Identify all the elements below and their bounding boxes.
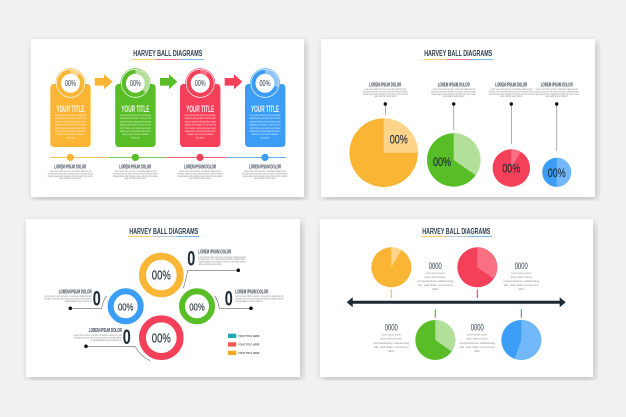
callout: left: LOREM IPSUM DOLOR [59, 290, 92, 296]
panel: ring cluster [26, 219, 300, 377]
text block: top right [503, 261, 540, 291]
heading: descending pies: HARVEY BALL DIAGRAMS [424, 49, 493, 58]
blue pie with label: magna aliquam erat volutpat ut wisi enim ad minim veniam [534, 92, 580, 96]
card: red: Lorem ipsum dolor sit amet, consectetur [185, 113, 216, 117]
arrow: yellow [95, 74, 113, 89]
pie: red [457, 247, 497, 298]
card: yellow: YOUR TITLE [56, 104, 84, 114]
timeline captions: LOREM IPSUM DOLOR [54, 165, 87, 171]
callout: right: LOREM IPSUM DOLOR [235, 290, 269, 296]
card: red: aliquam erat volutpat. Ut wisi enim ad [185, 123, 216, 127]
callout: left: Lorem ipsum dolor sit amet, consectetur adipiscing elit [44, 294, 92, 298]
callout: top right: 0 [187, 248, 195, 271]
callout: top right: LOREM IPSUM DOLOR [198, 250, 232, 256]
text block: top middle [417, 261, 454, 291]
card: blue: minim veniam, quis nostrud exerci tation [250, 126, 281, 130]
callout: right: Lorem ipsum dolor sit amet, consectetur adipiscing elit [235, 294, 283, 298]
callout: right [215, 288, 284, 311]
text block: bottom middle [459, 323, 496, 353]
card: red: euismod tincidunt ut laoreet dolore magna [185, 119, 216, 123]
card: yellow: ullamcorper suscipit lobortis nisl ut [55, 129, 86, 133]
timeline with dots [50, 154, 286, 161]
pie: yellow [371, 247, 411, 298]
card: green: adipiscing elit, sed diam nonummy nibh [120, 116, 151, 120]
card: green: euismod tincidunt ut laoreet dolore magna [120, 119, 151, 123]
legend: YOUR TITLE HERE [238, 351, 260, 355]
heading: process cards [132, 49, 204, 60]
callout: top right: quis nostrud exerci tation [198, 262, 222, 266]
card: yellow: 00% [65, 79, 76, 88]
text block: bottom left: nibh. [388, 349, 395, 353]
card: yellow: duis autem [66, 135, 75, 139]
timeline captions [48, 165, 288, 180]
arrow: red [225, 74, 242, 89]
callout: right: 0 [225, 288, 233, 311]
card: yellow: minim veniam, quis nostrud exerci tation [55, 126, 86, 130]
card: green: aliquip ex ea commodo consequat [122, 132, 149, 136]
callout: bottom left: magna aliquam erat volutpat ut [91, 338, 121, 342]
card: blue: Lorem ipsum dolor sit amet, consectetur [250, 113, 281, 117]
timeline captions: Lorem ipsum dolor sit amet, consectetur adipiscing elit [49, 169, 91, 173]
yellow pie with label: 00% [390, 132, 408, 146]
text block: top right: ipsum dolor sit amet, [510, 275, 533, 279]
red pie with label: 00% [502, 162, 521, 176]
red pie with label: Lorem ipsum dolor sit amet, consectetur adipiscing elit [490, 87, 532, 91]
callout: left: 0 [93, 288, 101, 311]
callout: right: magna aliquam erat volutpat ut [236, 299, 263, 303]
callout: left: magna aliquam erat volutpat ut [64, 299, 92, 303]
ring: blue left [111, 291, 141, 321]
timeline captions: LOREM IPSUM DOLOR [184, 165, 216, 171]
card: blue: 00% [260, 79, 270, 88]
ring: yellow top: 00% [152, 269, 171, 283]
red pie with label: LOREM IPSUM DOLOR [495, 83, 528, 89]
text block: top right: nibh. [518, 287, 525, 291]
card: yellow [50, 68, 91, 147]
red pie with label: quis nostrud exerci tation [500, 94, 523, 98]
text block: top middle: elit, sed diam nonummy [418, 283, 454, 287]
ring: red bottom: 00% [152, 331, 171, 345]
card: yellow: euismod tincidunt ut laoreet dolore magna [55, 119, 86, 123]
panel: descending pies [321, 39, 595, 197]
card: red: ullamcorper suscipit lobortis nisl ut [185, 129, 216, 133]
timeline captions: LOREM IPSUM DOLOR [249, 165, 281, 171]
heading: timeline pies [421, 227, 492, 237]
green pie with label: magna aliquam erat volutpat ut wisi enim ad minim veniam [431, 92, 477, 96]
timeline captions: sed diam nonummy nibh euismod tincidunt ut laoreet dolore [48, 171, 93, 175]
heading: ring cluster [128, 227, 199, 237]
timeline captions: quis nostrud exerci tation [124, 176, 147, 180]
card: red: aliquip ex ea commodo consequat [187, 132, 213, 136]
timeline captions: sed diam nonummy nibh euismod tincidunt ut laoreet dolore [178, 171, 223, 175]
card: yellow: Lorem ipsum dolor sit amet, consectetur [55, 113, 86, 117]
pie: blue [501, 309, 541, 360]
red pie with label: magna aliquam erat volutpat ut wisi enim ad minim veniam [489, 92, 534, 96]
card: green: Lorem ipsum dolor sit amet, consectetur [120, 113, 151, 117]
card: blue: aliquam erat volutpat. Ut wisi enim ad [250, 123, 281, 127]
timeline captions: Lorem ipsum dolor sit amet, consectetur adipiscing elit [114, 169, 156, 173]
text block: top middle: 0000 [429, 261, 442, 271]
ring: green right: 00% [189, 301, 205, 313]
yellow pie with label: Lorem ipsum dolor sit amet, consectetur adipiscing elit [364, 87, 406, 91]
timeline captions: sed diam nonummy nibh euismod tincidunt ut laoreet dolore [242, 171, 288, 175]
card: green: YOUR TITLE [121, 104, 149, 114]
legend: YOUR TITLE HERE [238, 334, 260, 338]
legend [228, 334, 260, 355]
callout: left [44, 288, 107, 311]
double arrow [347, 297, 566, 307]
text block: top right: 0000 [515, 261, 528, 271]
timeline captions: magna aliquam erat volutpat ut wisi enim ad minim veniam [242, 174, 288, 178]
text block: bottom middle: Lorem ipsum Lorem [467, 333, 488, 337]
card: green [115, 68, 156, 147]
card: green: aliquam erat volutpat. Ut wisi enim ad [120, 123, 151, 127]
text block: bottom left: elit, sed diam nonummy [374, 345, 410, 349]
card: green: minim veniam, quis nostrud exerci tation [120, 126, 151, 130]
card: blue: aliquip ex ea commodo consequat [252, 132, 278, 136]
card: blue: euismod tincidunt ut laoreet dolore magna [250, 119, 281, 123]
heading: process cards: HARVEY BALL DIAGRAMS [133, 49, 203, 58]
timeline captions: quis nostrud exerci tation [189, 176, 211, 180]
timeline captions: magna aliquam erat volutpat ut wisi enim ad minim veniam [48, 174, 93, 178]
panel: timeline pies [320, 219, 593, 377]
card: green: ullamcorper suscipit lobortis nisl ut [120, 129, 151, 133]
heading: descending pies [423, 49, 493, 60]
timeline captions: quis nostrud exerci tation [254, 176, 276, 180]
green pie with label: sed diam nonummy nibh euismod tincidunt ut laoreet dolore [431, 89, 477, 93]
timeline captions: Lorem ipsum dolor sit amet, consectetur adipiscing elit [244, 169, 286, 173]
timeline captions: Lorem ipsum dolor sit amet, consectetur adipiscing elit [179, 169, 221, 173]
text block: bottom left: consectetuer adipiscing [373, 341, 410, 345]
ring: yellow top [142, 256, 180, 294]
card: red: minim veniam, quis nostrud exerci tation [185, 126, 216, 130]
card: red: duis autem [196, 135, 205, 139]
red pie with label [489, 83, 534, 187]
text block: bottom middle: ipsum dolor sit amet, [466, 337, 489, 341]
blue pie with label: LOREM IPSUM DOLOR [541, 83, 573, 89]
text block: top middle: nibh. [432, 287, 439, 291]
callout: right: sed diam nonummy nibh euismod tincidunt ut laoreet dolore [235, 296, 284, 300]
card: red: adipiscing elit, sed diam nonummy nibh [185, 116, 216, 120]
card: yellow: aliquip ex ea commodo consequat [58, 132, 84, 136]
red pie with label: sed diam nonummy nibh euismod tincidunt ut laoreet dolore [489, 89, 534, 93]
blue pie with label: Lorem ipsum dolor sit amet, consectetur adipiscing elit [536, 87, 578, 91]
yellow pie with label: LOREM IPSUM DOLOR [369, 83, 402, 89]
card: blue: duis autem [260, 135, 270, 139]
card: blue [245, 68, 285, 147]
text block: top right: Lorem ipsum Lorem [511, 271, 532, 275]
callout: bottom left: Lorem ipsum dolor sit amet, consectetur adipiscing elit [74, 333, 122, 337]
callout: bottom left [74, 326, 150, 361]
callout: bottom left: 0 [123, 326, 131, 349]
ring: green right [182, 291, 212, 321]
timeline captions: sed diam nonummy nibh euismod tincidunt ut laoreet dolore [113, 171, 158, 175]
blue pie with label: quis nostrud exerci tation [546, 94, 568, 98]
card: blue: adipiscing elit, sed diam nonummy nibh [250, 116, 281, 120]
text block: bottom left: Lorem ipsum Lorem [381, 333, 402, 337]
text block: bottom middle: 0000 [471, 323, 484, 333]
card: green: duis autem [131, 135, 140, 139]
card: red: 00% [195, 79, 206, 88]
card: red [180, 68, 220, 147]
yellow pie with label [349, 83, 418, 187]
timeline captions: magna aliquam erat volutpat ut wisi enim ad minim veniam [113, 174, 158, 178]
card: yellow: aliquam erat volutpat. Ut wisi enim ad [55, 123, 86, 127]
blue pie with label [534, 83, 580, 187]
ring: blue left: 00% [118, 301, 133, 313]
blue pie with label: sed diam nonummy nibh euismod tincidunt ut laoreet dolore [534, 89, 580, 93]
timeline captions: magna aliquam erat volutpat ut wisi enim ad minim veniam [178, 174, 223, 178]
card: yellow: adipiscing elit, sed diam nonummy nibh [55, 116, 86, 120]
pie: green [415, 309, 455, 360]
callout: bottom left: sed diam nonummy nibh euismod tincidunt ut laoreet dolore [74, 335, 122, 339]
legend: YOUR TITLE HERE [238, 343, 260, 347]
green pie with label: LOREM IPSUM DOLOR [438, 83, 470, 89]
callout: top right: Lorem ipsum dolor sit amet, consectetur adipiscing elit [198, 255, 246, 259]
text block: top middle: ipsum dolor sit amet, [424, 275, 447, 279]
green pie with label: quis nostrud exerci tation [443, 94, 465, 98]
text block: top middle: Lorem ipsum Lorem [425, 271, 446, 275]
text block: bottom left: 0000 [385, 323, 398, 333]
callout: bottom left: LOREM IPSUM DOLOR [89, 328, 122, 334]
text block: top right: consectetuer adipiscing [503, 279, 540, 283]
card: red: YOUR TITLE [186, 104, 214, 114]
callout: left: sed diam nonummy nibh euismod tincidunt ut laoreet dolore [44, 296, 92, 300]
timeline captions: LOREM IPSUM DOLOR [119, 165, 152, 171]
blue pie with label: 00% [548, 166, 566, 180]
yellow pie with label: quis nostrud exerci tation [374, 94, 397, 98]
card: green: 00% [130, 79, 141, 88]
card: blue: YOUR TITLE [251, 104, 279, 114]
callout: top right: magna aliquam erat volutpat ut wisi enim ad minim veniam [198, 260, 246, 264]
text block: top middle: consectetuer adipiscing [417, 279, 454, 283]
yellow pie with label: sed diam nonummy nibh euismod tincidunt ut laoreet dolore [363, 89, 408, 93]
panel: process cards [31, 39, 304, 197]
green pie with label: 00% [433, 155, 451, 169]
callout: top right: sed diam nonummy nibh euismod tincidunt ut laoreet dolore [198, 257, 246, 261]
green pie with label [427, 83, 480, 187]
green pie with label: Lorem ipsum dolor sit amet, consectetur adipiscing elit [433, 87, 475, 91]
text block: bottom middle: consectetuer adipiscing [459, 341, 496, 345]
heading: ring cluster: HARVEY BALL DIAGRAMS [129, 227, 199, 236]
arrow: green [160, 74, 177, 89]
text block: bottom left: ipsum dolor sit amet, [380, 337, 403, 341]
text block: top right: elit, sed diam nonummy [504, 283, 540, 287]
text block: bottom middle: elit, sed diam nonummy [460, 345, 496, 349]
callout: top right [183, 248, 246, 288]
text block: bottom middle: nibh. [474, 349, 481, 353]
card: blue: ullamcorper suscipit lobortis nisl ut [250, 129, 281, 133]
timeline captions: quis nostrud exerci tation [59, 176, 82, 180]
yellow pie with label: magna aliquam erat volutpat ut wisi enim ad minim veniam [363, 92, 408, 96]
heading: timeline pies: HARVEY BALL DIAGRAMS [422, 227, 491, 236]
text block: bottom left [373, 323, 410, 353]
ring: red bottom [142, 319, 180, 357]
